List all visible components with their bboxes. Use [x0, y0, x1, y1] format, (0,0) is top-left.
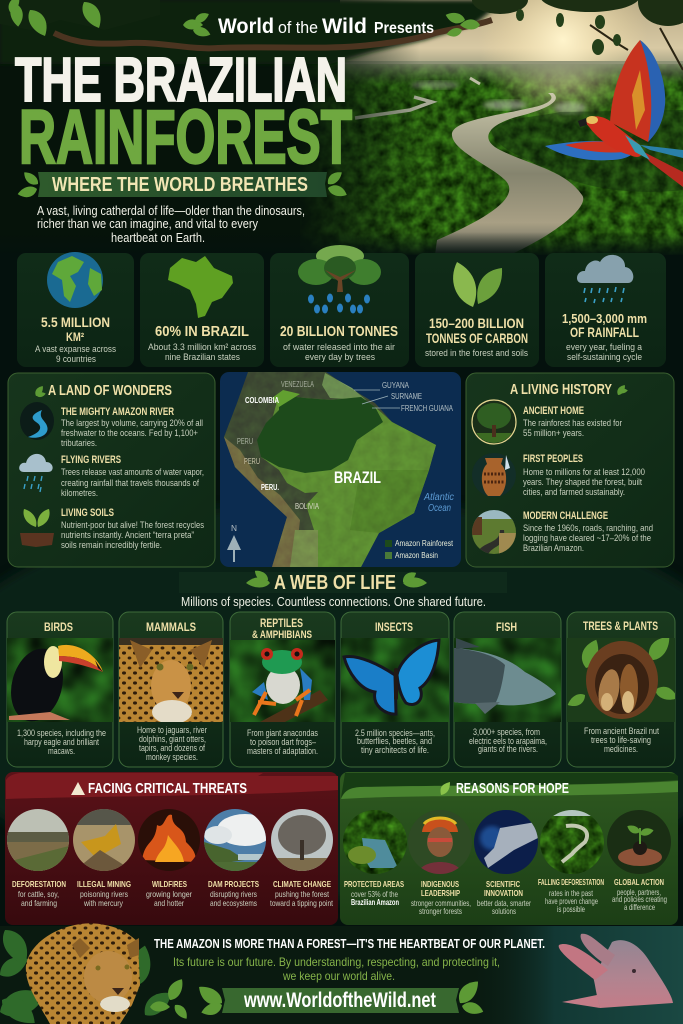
- card: birds: harpy eagle and brilliant: [24, 737, 99, 748]
- icon: leaf: [440, 782, 450, 795]
- section heading: a web of life: [179, 568, 507, 609]
- stat card: 5.5 million km2: 9 countries: [56, 354, 96, 365]
- banner: [341, 773, 678, 798]
- hope: global action: a difference: [624, 902, 655, 912]
- stat card: 60% in Brazil: nine Brazilian states: [165, 352, 240, 363]
- card: reptiles and amphibians: [230, 612, 335, 767]
- item: living soils: Nutrient-poor but alive! The forest recycles: [61, 520, 204, 531]
- hope: protected areas: cover 53% of the: [351, 889, 398, 899]
- hope: global action: people, partners,: [617, 887, 661, 897]
- icon: modern road: [472, 510, 517, 555]
- hope: global action: GLOBAL ACTION: [614, 877, 664, 887]
- card: insects: butterflies, beetles, and: [357, 736, 432, 747]
- map labels: PERU.: [261, 483, 279, 492]
- threat: wildfires: growing longer: [146, 889, 192, 899]
- title: RAINFOREST: [19, 95, 352, 180]
- item: modern challenge: [523, 510, 653, 554]
- stat card: carbon: TONNES OF CARBON: [426, 330, 528, 346]
- card: mammals: Home to jaguars, river: [137, 725, 207, 736]
- header: World of the Wild Presents: of the: [278, 18, 318, 37]
- stat card: rainfall: 1,500–3,000 mm: [562, 311, 647, 326]
- threat: wildfires: [138, 809, 200, 908]
- item: modern challenge: MODERN CHALLENGE: [523, 510, 608, 522]
- map labels: FRENCH GUIANA: [401, 404, 454, 413]
- hope: scientific innovation: [474, 810, 538, 916]
- threat: deforestation: DEFORESTATION: [12, 879, 66, 889]
- header leaves right: [444, 10, 480, 38]
- title: [15, 46, 352, 180]
- map labels: PERU: [237, 437, 253, 446]
- item: modern challenge: logging have cleared ~17–20% of the: [523, 533, 651, 544]
- item: modern challenge: Since the 1960s, roads, ranching, and: [523, 523, 653, 534]
- footer band: [0, 926, 683, 1024]
- hope: falling deforestation: rates in the past: [549, 888, 593, 898]
- threat: dam projects: disrupting rivers: [210, 889, 257, 899]
- heading: [33, 382, 172, 399]
- stat card: 60% in Brazil: [140, 253, 264, 367]
- card: insects: 2.5 million species—ants,: [355, 728, 435, 739]
- hope: falling deforestation: FALLING DEFORESTATION: [538, 877, 604, 887]
- north arrow: [227, 524, 241, 562]
- heading: A LAND OF WONDERS: [48, 382, 172, 399]
- item: living soils: LIVING SOILS: [61, 507, 114, 519]
- panel: reasons for hope: [340, 772, 678, 925]
- stat card: 5.5 million km2: 5.5 MILLION: [41, 314, 110, 330]
- hope: scientific innovation: better data, smarter: [477, 898, 531, 908]
- item: ancient home: 55 million+ years.: [523, 428, 584, 439]
- stat card: 20 billion tonnes: every day by trees: [305, 352, 375, 363]
- icon: tree with water drops: [298, 245, 381, 314]
- intro text: A vast, living catherdal of life—older than the dinosaurs,: [37, 204, 305, 218]
- item: modern challenge: Brazilian Amazon.: [523, 543, 584, 554]
- map labels: Atlantic: [423, 492, 454, 503]
- hope: protected areas: [343, 810, 407, 907]
- hope: falling deforestation: have proven change: [545, 896, 598, 906]
- item: first peoples: cities, and farmed sustainably.: [523, 487, 625, 498]
- card: fish: FISH: [496, 620, 517, 634]
- tree canopy and hanging leaves: [0, 0, 683, 70]
- hope: protected areas: Brazilian Amazon: [351, 897, 399, 907]
- hope: indigenous leadership: stronger forests: [419, 906, 462, 916]
- item: mighty amazon river: The largest by volume, carrying 20% of all: [61, 418, 203, 429]
- panel: reasons for hope: REASONS FOR HOPE: [456, 780, 569, 797]
- hope: falling deforestation: [538, 810, 604, 914]
- card: trees and plants: [565, 612, 680, 767]
- card: mammals: dolphins, giant otters,: [139, 734, 206, 745]
- banner: [6, 773, 338, 799]
- card: insects: tiny architects of life.: [361, 745, 429, 756]
- intro text: [37, 204, 305, 245]
- image: toucan: [3, 638, 113, 727]
- threat: climate change: toward a tipping point: [270, 898, 333, 908]
- subtitle ribbon: WHERE THE WORLD BREATHES: [52, 174, 308, 196]
- map labels: BOLIVIA: [295, 502, 320, 511]
- item: flying rivers: Trees release vast amounts of water vapor,: [61, 467, 204, 478]
- card: reptiles and amphibians: REPTILES: [260, 616, 303, 630]
- stat card: 5.5 million km2: [17, 252, 134, 367]
- icon: Brazil map: [168, 256, 233, 318]
- card: insects: INSECTS: [375, 620, 413, 634]
- threat: wildfires: WILDFIRES: [152, 879, 187, 889]
- website ribbon: www.WorldoftheWild.net: [243, 989, 436, 1012]
- threat: dam projects: and ecosystems: [210, 898, 257, 908]
- map labels: BRAZIL: [334, 468, 381, 487]
- panel: facing critical threats: [5, 772, 338, 925]
- icon: globe: [47, 252, 103, 308]
- item: mighty amazon river: tributaries.: [61, 438, 97, 449]
- branch: [54, 20, 492, 48]
- threat: illegal mining: poisoning rivers: [80, 889, 128, 899]
- card: reptiles and amphibians: masters of adaptation.: [247, 746, 318, 757]
- item: ancient home: ANCIENT HOME: [523, 405, 584, 417]
- card: fish: giants of the rivers.: [478, 744, 538, 755]
- card: insects: [341, 612, 449, 767]
- image: jaguar: [119, 638, 223, 724]
- hope: indigenous leadership: INDIGENOUS: [421, 879, 459, 889]
- macaw: [545, 40, 683, 187]
- card: fish: [454, 612, 561, 767]
- image: Brazil nut pod: [567, 638, 675, 722]
- card: fish: electric eels to arapaima,: [469, 736, 547, 747]
- card: reptiles and amphibians: to poison dart frogs–: [250, 737, 317, 748]
- threat: wildfires: and hotter: [154, 898, 184, 908]
- stat card: 5.5 million km2: A vast expanse across: [35, 344, 116, 355]
- closing statement: Its future is our future. By understanding, respecting, and protecting it,: [173, 955, 500, 969]
- section heading: a web of life: A WEB OF LIFE: [274, 572, 396, 594]
- stat card: rainfall: self-sustaining cycle: [567, 352, 642, 363]
- threat: illegal mining: ILLEGAL MINING: [77, 879, 131, 889]
- icon: leaves: [453, 262, 502, 307]
- card: reptiles and amphibians: & AMPHIBIANS: [252, 629, 312, 641]
- hero scene: aerial rainforest and river: [0, 0, 683, 256]
- legend: Amazon Basin: [395, 551, 438, 560]
- item: first peoples: [523, 453, 645, 498]
- hope: indigenous leadership: stronger communities,: [411, 898, 471, 908]
- card: birds: [3, 612, 113, 767]
- card: birds: 1,300 species, including the: [17, 728, 106, 739]
- header: World of the Wild Presents: World: [218, 15, 274, 38]
- card: trees and plants: medicines.: [604, 744, 638, 755]
- card: mammals: MAMMALS: [146, 620, 196, 634]
- hope: scientific innovation: INNOVATION: [484, 888, 523, 898]
- card: trees and plants: trees to life-saving: [591, 735, 651, 746]
- map labels: PERU: [244, 457, 260, 466]
- stat card: rainfall: every year, fueling a: [566, 342, 643, 353]
- panel: a land of wonders: [8, 373, 215, 567]
- card: mammals: tapirs, and dozens of: [139, 743, 205, 754]
- stat card: rainfall: [545, 253, 666, 367]
- stat card: 5.5 million km2: KM²: [66, 330, 84, 344]
- item: first peoples: Home to millions for at least 12,000: [523, 467, 645, 478]
- card: reptiles and amphibians: From giant anacondas: [247, 728, 318, 739]
- item: flying rivers: FLYING RIVERS: [61, 454, 121, 466]
- icon: sprout in soil: [20, 509, 54, 547]
- image: tree frog: [230, 640, 335, 722]
- item: flying rivers: creating rainfall that travels thousands of: [61, 478, 199, 489]
- item: mighty amazon river: THE MIGHTY AMAZON RIVER: [61, 406, 174, 418]
- threat: deforestation: and farming: [21, 898, 57, 908]
- closing statement: we keep our world alive.: [282, 969, 395, 983]
- card: fish: 3,000+ species, from: [473, 727, 540, 738]
- hope: scientific innovation: solutions: [492, 906, 516, 916]
- item: mighty amazon river: [61, 406, 203, 449]
- stat card: carbon: 150–200 BILLION: [429, 315, 524, 331]
- header: World of the Wild Presents: Presents: [374, 20, 434, 37]
- item: ancient home: The rainforest has existed for: [523, 418, 622, 429]
- stat card: 20 billion tonnes: [270, 245, 409, 367]
- item: living soils: [61, 507, 204, 551]
- hope: indigenous leadership: LEADERSHIP: [421, 888, 460, 898]
- item: first peoples: FIRST PEOPLES: [523, 453, 583, 465]
- closing statement: [154, 937, 545, 983]
- legend: Amazon Rainforest: [395, 539, 454, 548]
- item: flying rivers: kilometres.: [61, 488, 98, 499]
- threat: illegal mining: [73, 809, 135, 908]
- stat card: 60% in Brazil: 60% IN BRAZIL: [155, 323, 249, 340]
- icon: ancient tree: [472, 400, 516, 445]
- map labels: GUYANA: [382, 381, 410, 390]
- panel: facing critical threats: FACING CRITICAL THREATS: [88, 780, 247, 797]
- panel: a living history: [466, 373, 674, 567]
- threat: climate change: CLIMATE CHANGE: [273, 879, 331, 889]
- stat card: 60% in Brazil: About 3.3 million km² across: [148, 342, 256, 353]
- item: mighty amazon river: freshwater to the oceans. Fed by 1,100+: [61, 428, 198, 439]
- section heading: a web of life: Millions of species. Countless connections. One shared future.: [181, 595, 486, 609]
- item: first peoples: years. They shaped the forest, built: [523, 477, 642, 488]
- threat: deforestation: for cattle, soy,: [18, 889, 59, 899]
- hope: protected areas: PROTECTED AREAS: [344, 879, 404, 889]
- icon: rain cloud: [577, 255, 633, 303]
- item: flying rivers: [61, 454, 204, 499]
- jaguar: [26, 923, 140, 1024]
- threat: dam projects: DAM PROJECTS: [208, 879, 259, 889]
- card: trees and plants: From ancient Brazil nut: [584, 726, 659, 737]
- card: mammals: [119, 612, 223, 767]
- intro text: richer than we can imagine, and vital to every: [37, 217, 259, 231]
- map labels: SURNAME: [391, 392, 422, 401]
- map labels: VENEZUELA: [281, 380, 314, 389]
- heading: A LIVING HISTORY: [510, 381, 612, 398]
- subtitle ribbon: [17, 169, 349, 200]
- header: World of the Wild Presents: [183, 10, 480, 39]
- map of the Amazon in South America: [220, 372, 461, 567]
- threat: climate change: pushing the forest: [275, 889, 330, 899]
- image: blue morpho butterfly: [341, 638, 449, 722]
- title: THE BRAZILIAN: [15, 46, 347, 115]
- icon: rain cloud: [19, 454, 53, 492]
- north arrow: N: [231, 524, 237, 533]
- threat: illegal mining: with mercury: [83, 898, 124, 908]
- card: mammals: monkey species.: [146, 752, 198, 763]
- threat: deforestation: [7, 809, 69, 908]
- stat card: carbon: [415, 253, 539, 367]
- item: ancient home: [523, 405, 622, 439]
- icon: clay vase: [472, 453, 516, 497]
- stat card: carbon: stored in the forest and soils: [425, 348, 528, 359]
- legend: [385, 539, 454, 560]
- intro text: heartbeat on Earth.: [111, 231, 205, 245]
- pink river dolphin: [559, 934, 673, 1008]
- hope: global action: [607, 810, 671, 912]
- hope: indigenous leadership: [408, 810, 472, 916]
- map labels: COLOMBIA: [245, 396, 279, 405]
- image: arapaima: [454, 638, 561, 722]
- header leaves left: [183, 10, 212, 39]
- card: birds: BIRDS: [44, 620, 73, 634]
- hope: falling deforestation: is possible: [557, 904, 585, 914]
- website ribbon: [195, 976, 485, 1018]
- threat: climate change: [270, 809, 333, 908]
- stat card: rainfall: OF RAINFALL: [570, 324, 639, 340]
- item: living soils: soils remain incredibly fertile.: [61, 540, 162, 551]
- map labels: Ocean: [428, 503, 451, 514]
- closing statement: THE AMAZON IS MORE THAN A FOREST—IT'S THE HEARTBEAT OF OUR PLANET.: [154, 937, 545, 951]
- item: living soils: nutrients instantly. Ancient “terra preta”: [61, 530, 194, 541]
- threat: dam projects: [204, 809, 266, 908]
- stat card: 20 billion tonnes: 20 BILLION TONNES: [280, 323, 398, 340]
- icon: warning triangle: [71, 782, 85, 795]
- header: World of the Wild Presents: Wild: [322, 15, 367, 38]
- card: birds: macaws.: [48, 746, 75, 757]
- stat card: 20 billion tonnes: of water released into the air: [283, 342, 395, 353]
- jungle leaves, left: [0, 924, 190, 1024]
- map labels: [237, 380, 454, 514]
- icon: river: [20, 402, 54, 440]
- hope: scientific innovation: SCIENTIFIC: [486, 879, 520, 889]
